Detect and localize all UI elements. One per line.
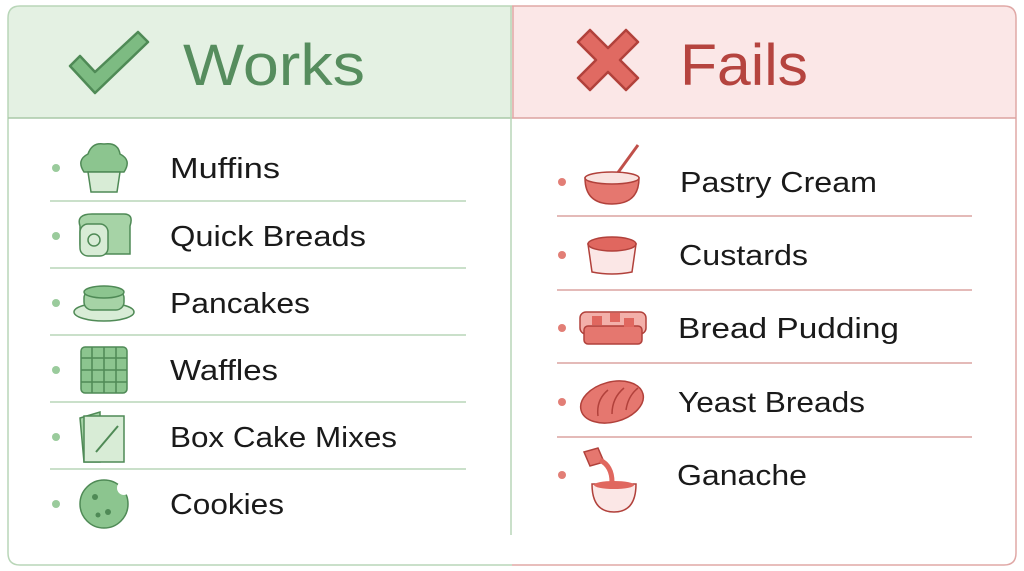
item: ganache: Ganache [677, 460, 807, 492]
item: waffles [81, 347, 278, 393]
item: pastry cream: Pastry Cream [680, 167, 877, 199]
heading: Fails: Fails [680, 33, 808, 98]
item: muffins: Muffins [170, 153, 280, 185]
icon: cross [578, 30, 638, 90]
item: ganache [584, 448, 807, 512]
item: pancakes: Pancakes [170, 288, 310, 320]
item: quick breads: Quick Breads [170, 221, 366, 253]
item: custards: Custards [679, 240, 808, 272]
item: bread pudding: Bread Pudding [678, 313, 899, 345]
item: box cake mixes [80, 412, 397, 462]
header: fails [578, 30, 808, 98]
item: yeast breads [576, 374, 865, 430]
item: cookies: Cookies [170, 489, 284, 521]
item: pancakes [74, 286, 310, 321]
item: bread pudding [580, 312, 899, 345]
item: yeast breads: Yeast Breads [678, 387, 865, 419]
item: box cake mixes: Box Cake Mixes [170, 422, 397, 454]
item: muffins [81, 144, 280, 192]
item: quick breads [79, 214, 366, 256]
heading: Works: Works [183, 33, 365, 98]
item: waffles: Waffles [170, 355, 278, 387]
item: cookies [80, 480, 284, 528]
item: pastry cream [585, 145, 877, 204]
header: works [70, 32, 365, 98]
item: custards [588, 237, 808, 274]
panel: fails list [557, 145, 972, 512]
icon: check [70, 32, 148, 93]
panel: works list [50, 144, 466, 528]
